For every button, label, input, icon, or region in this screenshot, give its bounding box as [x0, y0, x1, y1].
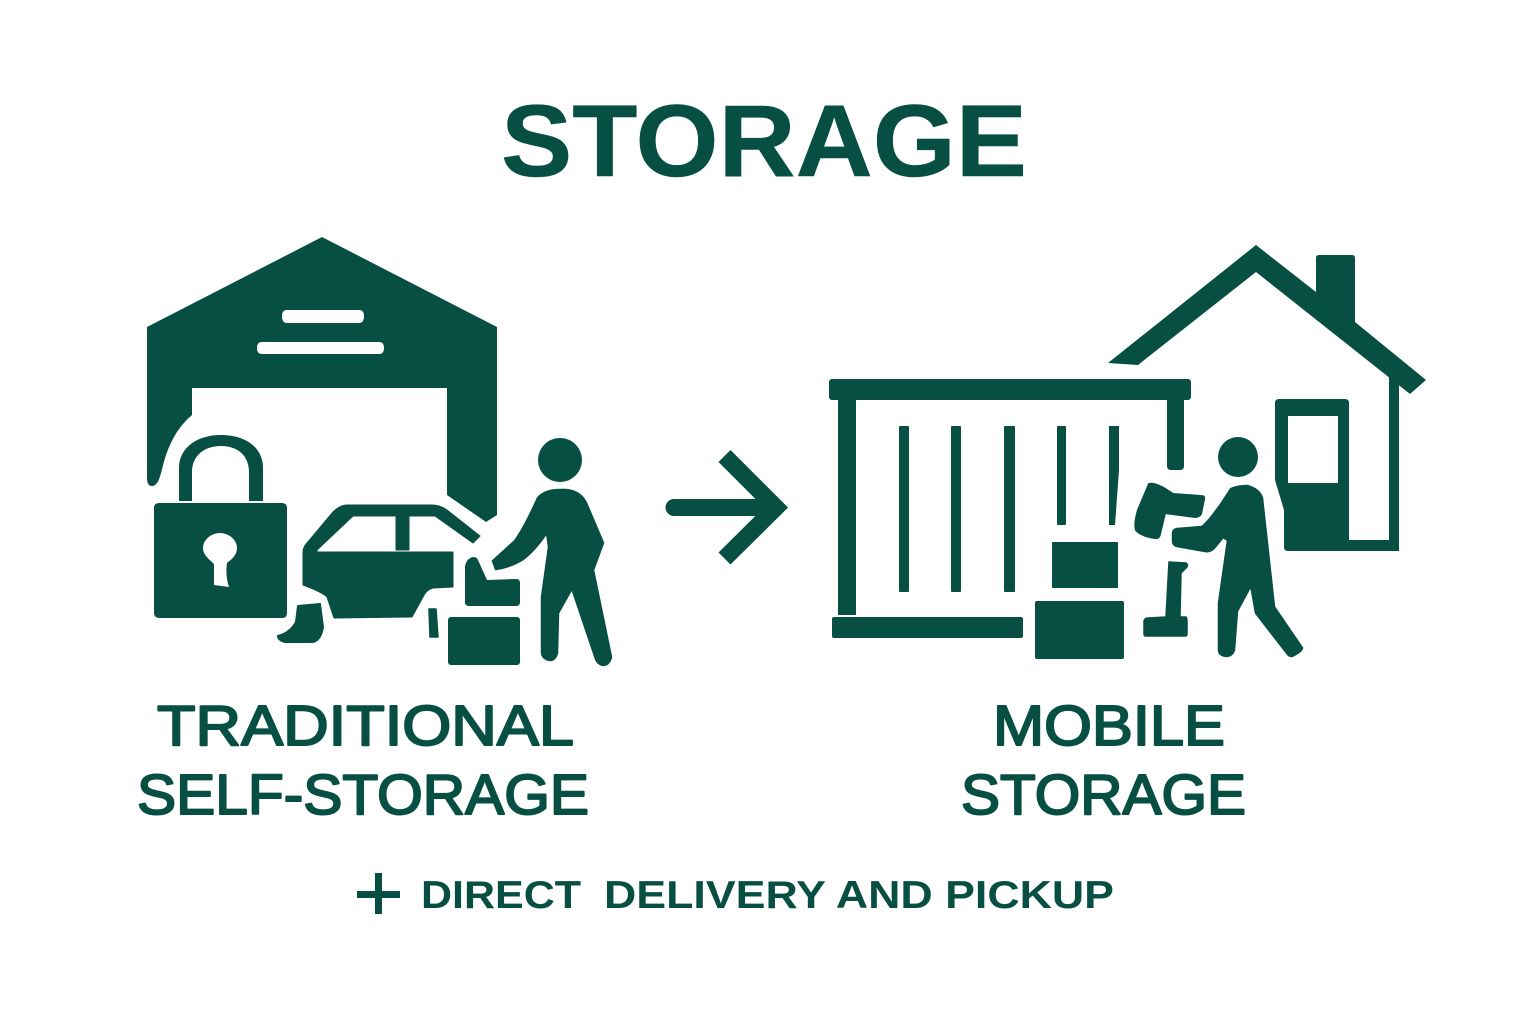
panel: traditional self-storage illustration	[147, 237, 611, 665]
icon: shipping container	[829, 379, 1191, 638]
icon: stacked boxes	[448, 557, 520, 665]
icon: person	[1173, 437, 1302, 656]
caption	[421, 874, 1114, 917]
label: traditional: TRADITIONAL	[157, 694, 574, 758]
icon: carried bag	[1135, 484, 1204, 538]
caption: DELIVERY AND PICKUP	[604, 874, 1114, 917]
label: self-storage: SELF-STORAGE	[137, 763, 589, 827]
caption: DIRECT	[421, 874, 581, 917]
icon: padlock	[154, 435, 287, 618]
icon: person	[493, 438, 611, 665]
title: STORAGE	[501, 84, 1027, 198]
icon: plus	[357, 873, 400, 914]
label: storage: STORAGE	[961, 763, 1246, 827]
icon: warehouse	[147, 237, 497, 522]
icon: dolly	[1144, 562, 1188, 636]
label: mobile: MOBILE	[993, 694, 1225, 758]
icon: stacked boxes	[1035, 542, 1124, 659]
icon: car	[278, 505, 480, 642]
panel: mobile storage illustration	[829, 245, 1426, 659]
icon: house	[1108, 245, 1426, 551]
arrow	[674, 456, 776, 558]
